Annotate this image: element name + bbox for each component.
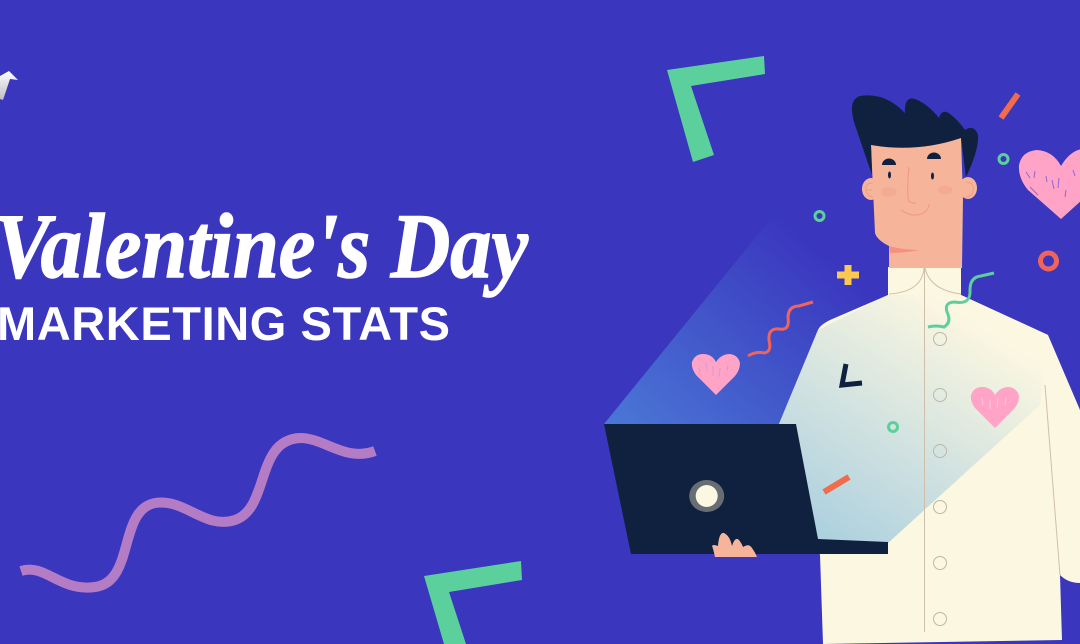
- eyebrows: [882, 159, 896, 165]
- shirt seams: [889, 267, 1060, 632]
- squiggle: purple: [21, 438, 375, 588]
- title: Valentine's Day: Valentine's Day: [0, 195, 529, 297]
- neck and face: [871, 138, 963, 268]
- light beam over background: [604, 168, 1000, 424]
- heart: large right: [1019, 149, 1080, 219]
- laptop logo: [689, 480, 724, 512]
- heart: shirt: [971, 387, 1019, 428]
- chin shadow: [889, 246, 920, 253]
- bracket: top green: [667, 56, 765, 162]
- red squiggle: [748, 302, 813, 356]
- shirt lit by beam: [779, 295, 1048, 543]
- confetti: [748, 94, 1056, 492]
- cheeks: [881, 187, 897, 197]
- shirt buttons: [934, 332, 946, 626]
- yellow plus: [837, 265, 859, 285]
- eyes: [888, 172, 891, 178]
- green squiggle: [928, 273, 994, 327]
- nose and smile: [901, 167, 929, 215]
- orange dash lower: [824, 477, 849, 492]
- bracket: bottom green: [424, 561, 522, 644]
- subtitle: Marketing Stats: MARKETING STATS: [0, 297, 450, 350]
- orange dash upper: [1001, 94, 1018, 118]
- heart: left: [692, 354, 740, 395]
- hair: [852, 95, 978, 177]
- L mark: [842, 364, 862, 385]
- ears: [862, 177, 977, 200]
- green rings: [815, 154, 1008, 432]
- hand: [712, 533, 757, 557]
- person: [604, 95, 1080, 644]
- shirt: [779, 267, 1080, 644]
- laptop: [604, 424, 888, 554]
- red ring: [1040, 253, 1056, 269]
- icon: paper bird: [0, 71, 18, 100]
